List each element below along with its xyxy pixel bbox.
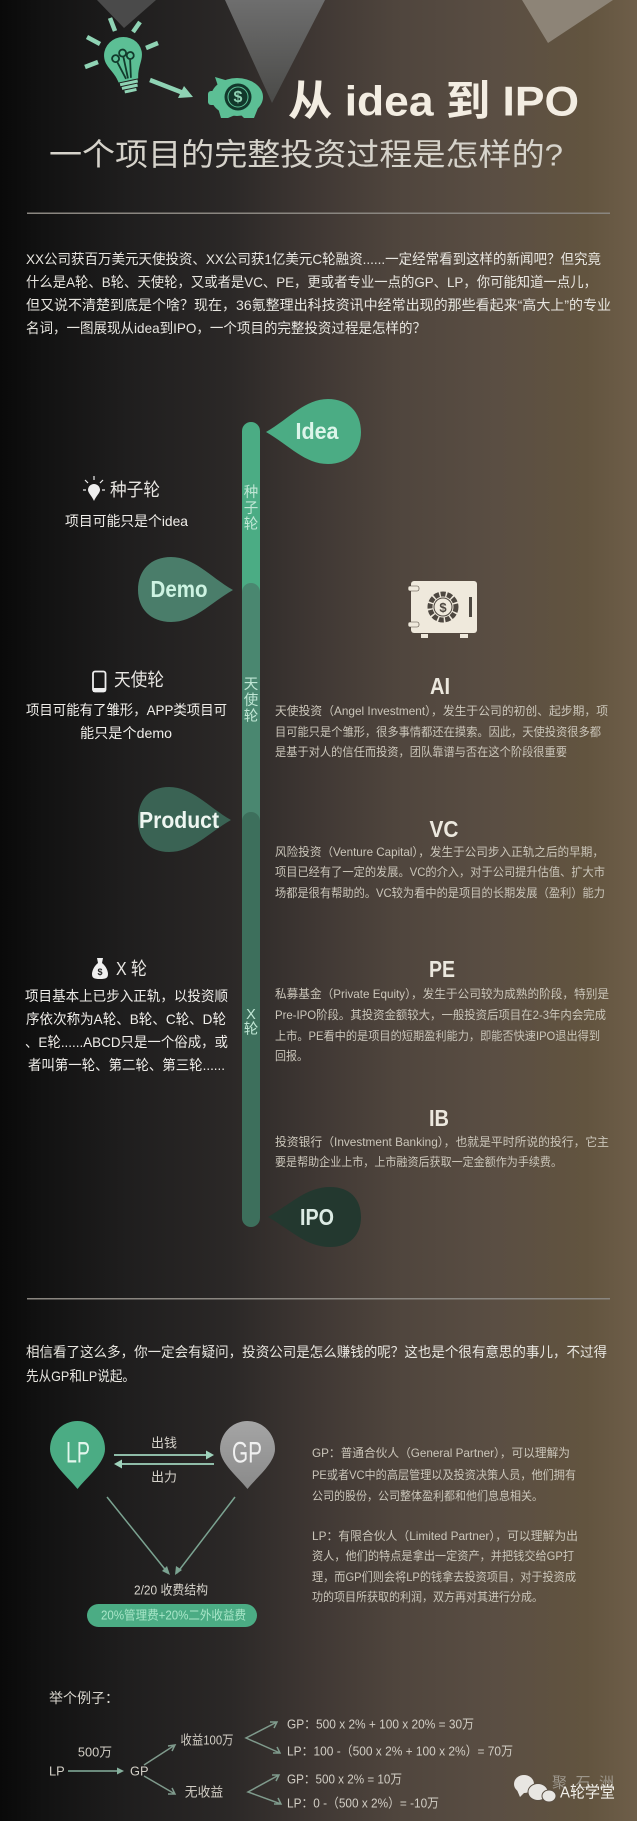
node: Idea — [266, 399, 361, 464]
panel: PE: 私募基金（Private Equity），发生于公司较为成熟的阶段，特别是 — [275, 987, 609, 1001]
vertical label: seed round: 轮 — [244, 516, 258, 533]
panel: PE: Pre-IPO阶段。其投资金额较大，一般投资后项目在2-3年内会完成 — [275, 1008, 606, 1022]
pin: LP: LP — [66, 1436, 90, 1470]
example flow: 500万 — [78, 1744, 112, 1760]
vertical label: seed round: 种 — [244, 484, 258, 501]
arrow: GP to fee — [175, 1497, 235, 1575]
text block: GP definition — [312, 1446, 576, 1503]
icon: light bulb — [85, 18, 158, 96]
panel: IB: 要是帮助企业上市，上市融资后获取一定金额作为手续费。 — [275, 1155, 562, 1169]
vertical label: X round: X — [246, 1007, 256, 1023]
node: Product: Product — [139, 807, 219, 833]
vertical label: X round — [244, 1007, 258, 1038]
intro text: 名词，一图展现从idea到IPO，一个项目的完整投资过程是怎样的？ — [26, 320, 426, 336]
panel: VC: VC — [430, 816, 458, 842]
left block: X round: X 轮 — [116, 959, 147, 979]
text block: LP definition: 理，而GP们则会将LP的钱拿去投资项目，对于投资成 — [312, 1570, 576, 1584]
transition text: 相信看了这么多，你一定会有疑问，投资公司是怎么赚钱的呢？这也是个很有意思的事儿，不过得 — [26, 1344, 607, 1360]
left block: seed round: 种子轮 — [110, 480, 160, 500]
fork: no gain — [248, 1775, 281, 1804]
fee pill: 20%管理费+20%二外收益费 — [101, 1608, 246, 1622]
pin: GP: GP — [232, 1436, 262, 1470]
vertical label: angel round: 轮 — [244, 708, 258, 725]
example flow: LP：100 -（500 x 2% + 100 x 2%）= 70万 — [287, 1744, 513, 1758]
intro text — [26, 251, 611, 336]
node: Demo: Demo — [150, 576, 208, 602]
text block: LP definition: LP：有限合伙人（Limited Partner），可以理解为出 — [312, 1529, 578, 1543]
left block: X round: 项目基本上已步入正轨，以投资顺 — [25, 988, 228, 1004]
panel: VC: 风险投资（Venture Capital），发生于公司步入正轨之后的早期， — [275, 845, 604, 859]
example flow: LP — [49, 1764, 65, 1778]
text block: GP definition: GP：普通合伙人（General Partner），可以理解为 — [312, 1446, 570, 1460]
left block: X round: 、E轮......ABCD只是一个俗成，或 — [25, 1034, 228, 1050]
panel: PE: PE — [429, 956, 455, 982]
transition text — [26, 1344, 607, 1384]
example flow: LP：0 -（500 x 2%）= -10万 — [287, 1796, 439, 1810]
arrow: LP to fee — [107, 1497, 170, 1575]
example flow: 收益100万 — [180, 1732, 234, 1748]
icon: small bulb — [83, 476, 105, 501]
watermark: 聚石洲 — [552, 1774, 614, 1792]
decorative top triangles — [97, 0, 613, 103]
arrow: effort GP to LP — [114, 1460, 214, 1484]
text block: GP definition: 公司的股份，公司整体盈利都和他们息息相关。 — [312, 1489, 543, 1503]
panel: VC — [275, 816, 605, 900]
watermark: A轮学堂 — [560, 1784, 615, 1802]
text block: LP definition — [312, 1529, 578, 1604]
diagram: LP GP fee structure — [50, 1421, 275, 1627]
arrow: GP to no gain — [144, 1776, 175, 1794]
left block: X round: 序依次称为A轮、B轮、C轮、D轮 — [26, 1011, 226, 1027]
icon: chat bubbles — [514, 1775, 556, 1802]
panel: VC: 项目已经有了一定的发展。VC的介入，对于公司提升估值、扩大市 — [275, 865, 605, 879]
pin: LP — [50, 1421, 105, 1489]
arrow: GP to gain — [144, 1745, 175, 1765]
example flow: GP：500 x 2% = 10万 — [287, 1772, 402, 1786]
fork: gain — [246, 1722, 280, 1753]
node: Demo — [138, 557, 233, 622]
intro text: 什么是A轮、B轮、天使轮，又或者是VC、PE，更或者专业一点的GP、LP，你可能知道一点儿， — [26, 274, 597, 290]
left block: angel round — [26, 670, 227, 741]
timeline bar — [242, 422, 260, 1227]
arrow: LP to GP — [68, 1768, 124, 1774]
icon: arrow from bulb to piggy — [150, 80, 193, 98]
panel: IB — [275, 1105, 609, 1169]
arrow: effort GP to LP: 出力 — [151, 1470, 177, 1484]
icon: money bag: $ — [97, 967, 103, 977]
icon: safe — [408, 581, 477, 638]
left block: X round — [25, 958, 228, 1073]
fee label: 2/20 收费结构 — [134, 1582, 208, 1598]
arrow: money LP to GP: 出钱 — [151, 1436, 177, 1450]
pin: GP — [220, 1421, 275, 1489]
example flow: GP：500 x 2% + 100 x 20% = 30万 — [287, 1716, 474, 1732]
panel: VC: 场都是很有帮助的。VC较为看中的是项目的长期发展（盈利）能力 — [275, 886, 605, 900]
panel: AI: 目可能只是个雏形，很多事情都还在摸索。因此，天使投资很多都 — [275, 725, 601, 739]
vertical label: seed round — [244, 484, 258, 533]
example heading: 举个例子： — [49, 1690, 119, 1706]
subtitle: 一个项目的完整投资过程是怎样的? — [49, 138, 563, 172]
icon: phone — [93, 672, 106, 692]
node: IPO: IPO — [300, 1204, 334, 1230]
node: Idea: Idea — [296, 418, 339, 444]
node: IPO — [268, 1187, 361, 1247]
panel: AI — [275, 673, 608, 759]
panel: PE — [275, 956, 609, 1063]
fee pill — [87, 1604, 257, 1627]
panel: IB: 投资银行（Investment Banking），也就是平时所说的投行，它主 — [275, 1135, 609, 1149]
panel: IB: IB — [429, 1105, 449, 1131]
vertical label: X round: 轮 — [244, 1021, 258, 1038]
left block: seed round: 项目可能只是个idea — [65, 513, 188, 529]
panel: AI: AI — [430, 673, 450, 699]
vertical label: angel round: 使 — [244, 692, 259, 709]
panel: AI: 天使投资（Angel Investment），发生于公司的初创、起步期，项 — [275, 704, 608, 718]
panel: PE: 回报。 — [275, 1049, 308, 1063]
left block: angel round: 天使轮 — [114, 670, 164, 690]
example flow: GP — [130, 1764, 148, 1778]
vertical label: angel round — [244, 677, 259, 725]
text block: LP definition: 功的项目所获取的利润，双方再对其进行分成。 — [312, 1590, 543, 1604]
left block: angel round: 能只是个demo — [80, 725, 172, 741]
divider — [27, 212, 610, 214]
left block: angel round: 项目可能有了雏形，APP类项目可 — [26, 702, 227, 718]
example flow — [49, 1716, 513, 1810]
panel: PE: 上市。PE看中的是项目的短期盈利能力，即能否快速IPO退出得到 — [275, 1029, 600, 1043]
watermark — [514, 1774, 615, 1802]
text block: GP definition: PE或者VC中的高层管理以及投资决策人员，他们拥有 — [312, 1468, 576, 1482]
panel: AI: 是基于对人的信任而投资，团队靠谱与否在这个阶段很重要 — [275, 745, 567, 759]
transition text: 先从GP和LP说起。 — [26, 1368, 135, 1384]
text block: LP definition: 资人，他们的特点是拿出一定资产，并把钱交给GP打 — [312, 1549, 574, 1563]
vertical label: angel round: 天 — [244, 677, 258, 693]
left block: seed round — [65, 476, 188, 529]
vertical label: seed round: 子 — [244, 500, 258, 517]
icon: piggy bank — [208, 77, 263, 118]
divider — [27, 1298, 610, 1300]
icon: money bag — [92, 958, 108, 979]
arrow: money LP to GP — [114, 1436, 214, 1460]
intro text: 但又说不清楚到底是个啥？现在，36氪整理出科技资讯中经常出现的那些看起来“高大上”的专业 — [26, 297, 611, 313]
node: Product — [138, 787, 231, 852]
icon: piggy bank: $ — [234, 89, 243, 106]
intro text: XX公司获百万美元天使投资、XX公司获1亿美元C轮融资......一定经常看到这样的新闻吧？但究竟 — [26, 251, 601, 267]
title: 从 idea 到 IPO — [288, 78, 579, 124]
example flow: 无收益 — [185, 1784, 223, 1800]
icon: safe: $ — [439, 600, 447, 615]
left block: X round: 者叫第一轮、第二轮、第三轮...... — [28, 1057, 225, 1073]
